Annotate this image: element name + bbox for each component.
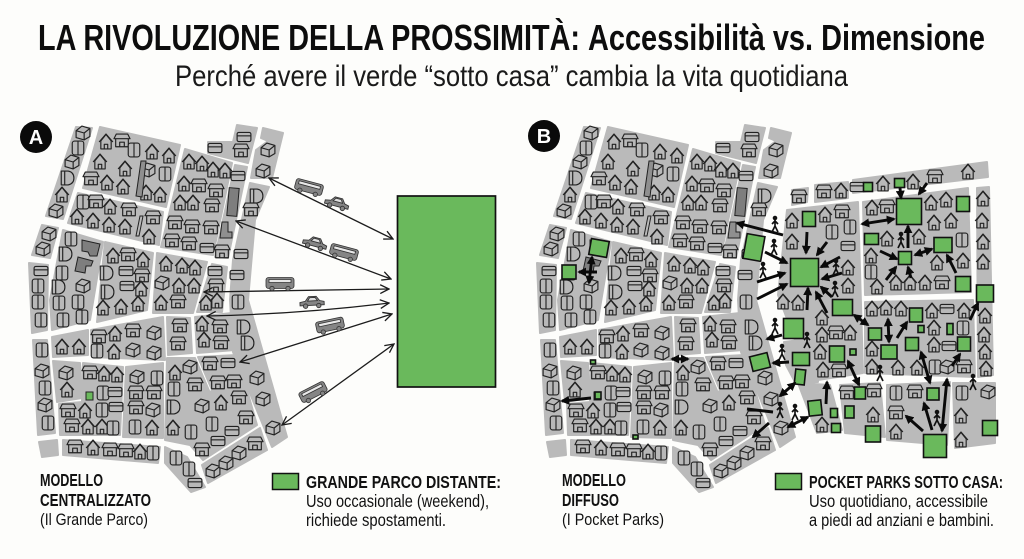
model A label: MODELLO [40,470,103,490]
vehicles [266,178,359,405]
legend A: richiede spostamenti. [306,510,446,530]
model B label: DIFFUSO [562,490,619,510]
houses [32,126,280,488]
large distant park [398,196,496,387]
legend B: Uso quotidiano, accessibile [809,491,988,511]
badge A [20,121,52,153]
legend A: Uso occasionale (weekend), [306,491,489,511]
title: LA RIVOLUZIONE DELLA PROSSIMITÀ: [38,17,580,58]
dark buildings and small park [75,161,239,400]
model B label: (I Pocket Parks) [562,511,664,529]
model B label [562,470,664,529]
map A: city blocks and houses [29,125,287,492]
pedestrians [760,216,976,426]
subtitle: Perché avere il verde “sotto casa” cambia la vita quotidiana [175,60,848,93]
model A label: CENTRALIZZATO [40,490,151,510]
panel B: diffuse model [528,120,1003,530]
badge B [528,120,560,152]
legend B [776,472,1003,530]
model A label [40,470,151,529]
legend A [272,472,501,530]
arrows from city to park [204,178,394,425]
legend A: GRANDE PARCO DISTANTE: [306,472,501,492]
map B: right city houses [776,164,995,447]
panel A: centralised model [20,121,501,530]
badge A: A [29,127,43,149]
model A label: (Il Grande Parco) [40,511,148,529]
badge B: B [537,126,551,148]
map B: left city (same fabric as A) [537,125,795,492]
city blocks [29,125,287,492]
pocket parks [562,178,998,458]
map B: right city blocks [778,162,995,448]
walking arrows between parks [562,183,978,437]
model B label: MODELLO [562,470,626,490]
